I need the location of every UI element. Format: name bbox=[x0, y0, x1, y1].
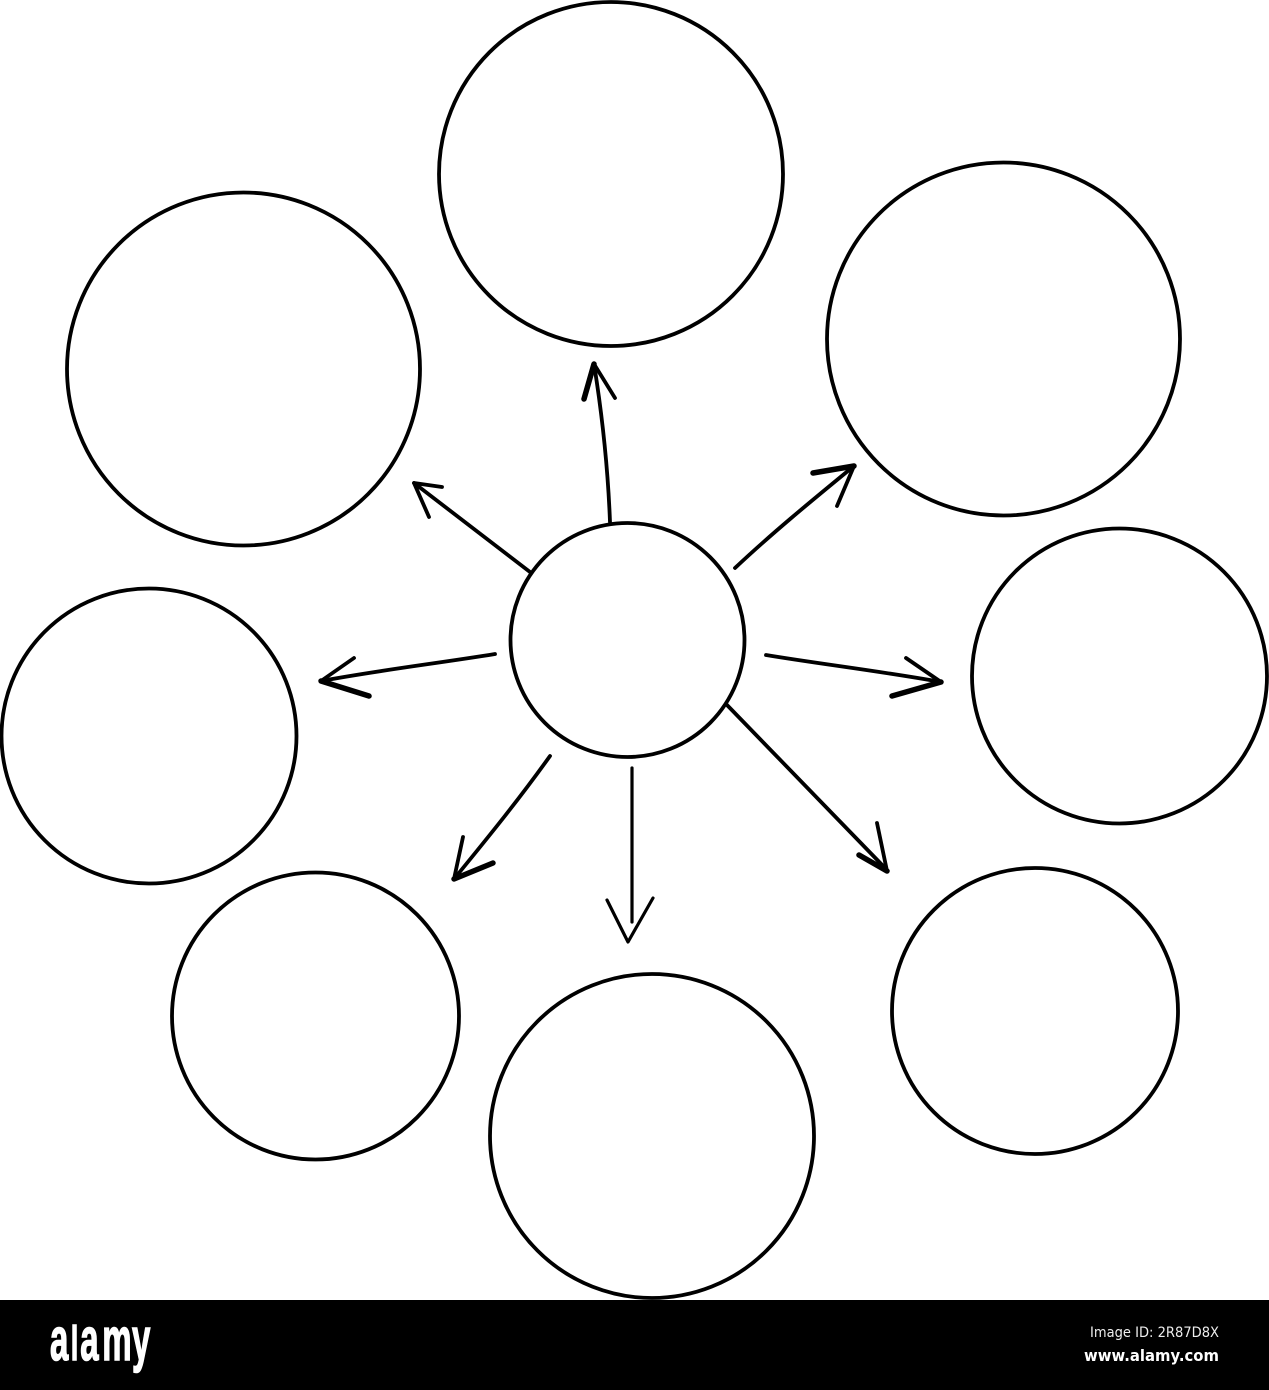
circle: top bbox=[439, 2, 783, 346]
arrow: left bbox=[321, 654, 495, 696]
arrow: upper right bbox=[735, 466, 854, 568]
image id: Image ID: 2R87D8X bbox=[1090, 1325, 1219, 1341]
arrow: lower right bbox=[727, 705, 887, 871]
logo: alamy: a bbox=[50, 1307, 68, 1374]
arrow: down bbox=[607, 768, 653, 942]
logo: alamy: m bbox=[102, 1307, 132, 1374]
circle: upper right bbox=[827, 162, 1180, 516]
arrow: lower left bbox=[454, 756, 550, 879]
circle: upper left bbox=[67, 192, 420, 546]
logo: alamy: y bbox=[132, 1307, 150, 1374]
website: www.alamy.com bbox=[1084, 1346, 1219, 1365]
arrow: right bbox=[766, 655, 941, 696]
logo: alamy bbox=[50, 1307, 150, 1374]
circle: right bbox=[972, 528, 1267, 824]
circle: center hub bbox=[510, 523, 744, 757]
circle: lower left bbox=[172, 872, 459, 1160]
circle: bottom bbox=[490, 974, 814, 1298]
footer bar bbox=[0, 1300, 1269, 1390]
logo: alamy: l bbox=[71, 1318, 78, 1371]
logo: alamy: a bbox=[80, 1307, 99, 1374]
circle: left bbox=[2, 588, 296, 884]
arrow: up bbox=[584, 364, 615, 522]
circle: lower right bbox=[892, 868, 1178, 1154]
arrow: upper left bbox=[414, 483, 530, 572]
